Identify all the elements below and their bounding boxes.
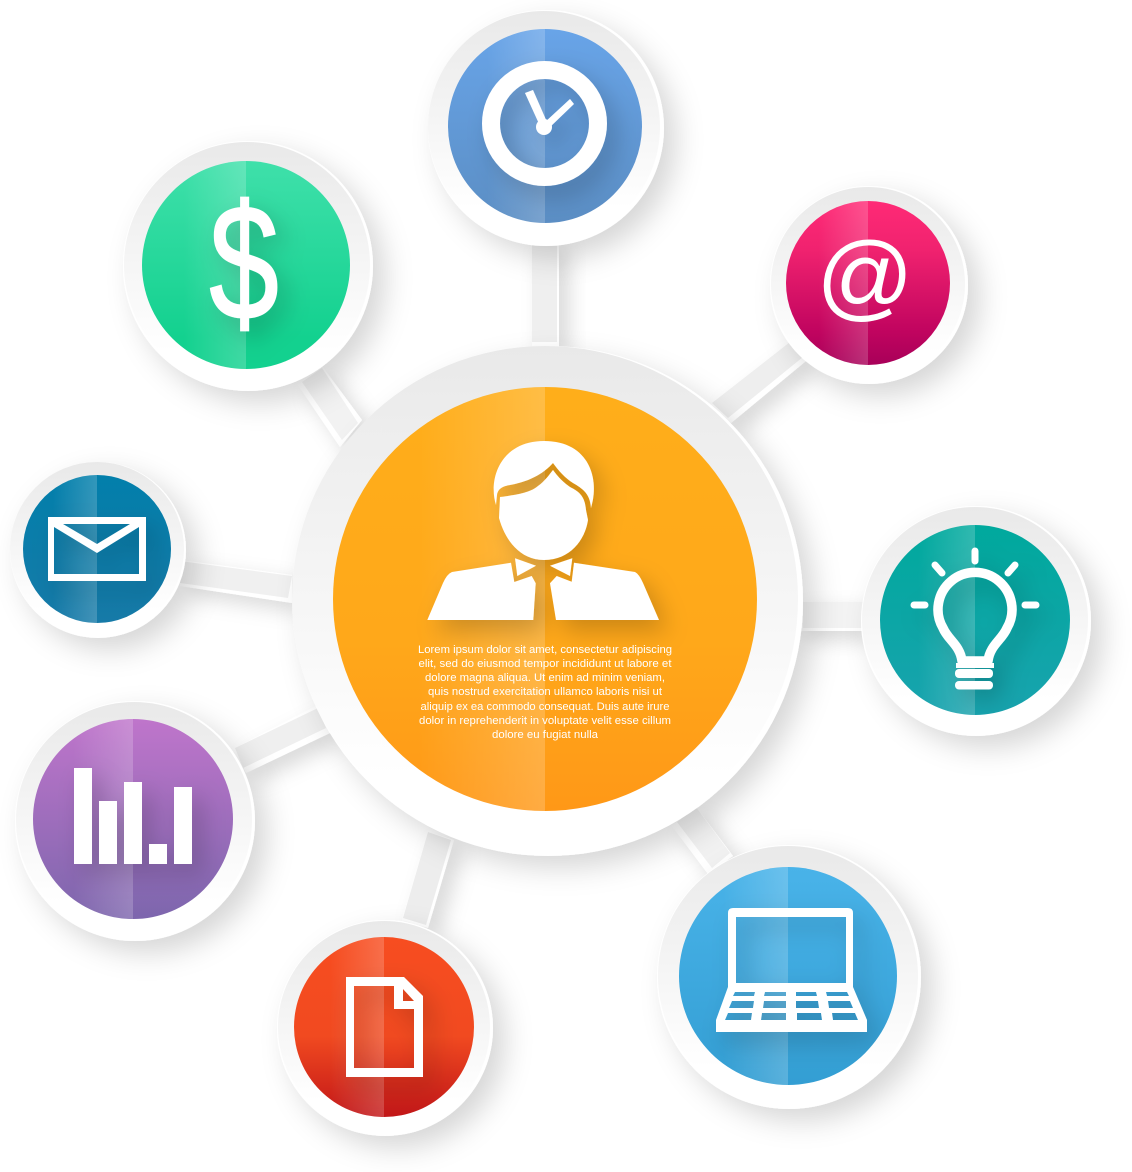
hub body text: dolore magna aliqua. Ut enim ad minim veniam,	[425, 672, 665, 684]
hub body text: Lorem ipsum dolor sit amet, consectetur adipiscing	[418, 644, 672, 656]
icon: document	[346, 977, 423, 1077]
connector: document	[402, 832, 454, 928]
hub body text: quis nostrud exercitation ullamco laboris nisi ut	[428, 686, 663, 698]
node: bar chart	[15, 701, 255, 941]
icon: laptop	[716, 908, 867, 1032]
connector: mail	[180, 560, 292, 603]
icon: light bulb	[914, 551, 1036, 690]
node: document	[277, 920, 493, 1136]
connector: dollar	[298, 366, 362, 447]
icon: person	[427, 441, 659, 620]
node: clock	[428, 10, 664, 246]
hub body text: aliquip ex ea commodo consequat. Duis aute irure	[420, 701, 670, 713]
icon: dollar glyph: $	[209, 170, 279, 354]
icon: at glyph: @	[816, 223, 914, 330]
connector: clock	[532, 240, 559, 350]
hub ring	[292, 346, 803, 856]
node: mail	[10, 462, 186, 638]
hub body text: dolor in reprehenderit in voluptate velit esse cillum	[419, 715, 671, 727]
connector: at sign	[712, 342, 806, 423]
connector: light bulb	[795, 602, 865, 631]
node: light bulb	[861, 506, 1091, 736]
icon: envelope	[48, 517, 146, 581]
hub body text: dolore eu fugiat nulla	[492, 729, 599, 741]
connector: chart	[235, 705, 330, 773]
hub body text	[418, 644, 672, 741]
icon: bar chart	[74, 768, 192, 864]
icon: clock	[491, 70, 598, 177]
hub body text: elit, sed do eiusmod tempor incididunt ut labore et	[418, 658, 672, 670]
node: at sign	[770, 186, 968, 384]
hub disc	[333, 387, 757, 811]
node: laptop	[657, 845, 921, 1109]
node: dollar	[123, 141, 373, 391]
connectors between hub and nodes	[180, 240, 865, 928]
connector: laptop	[672, 807, 733, 874]
central hub	[292, 346, 803, 856]
